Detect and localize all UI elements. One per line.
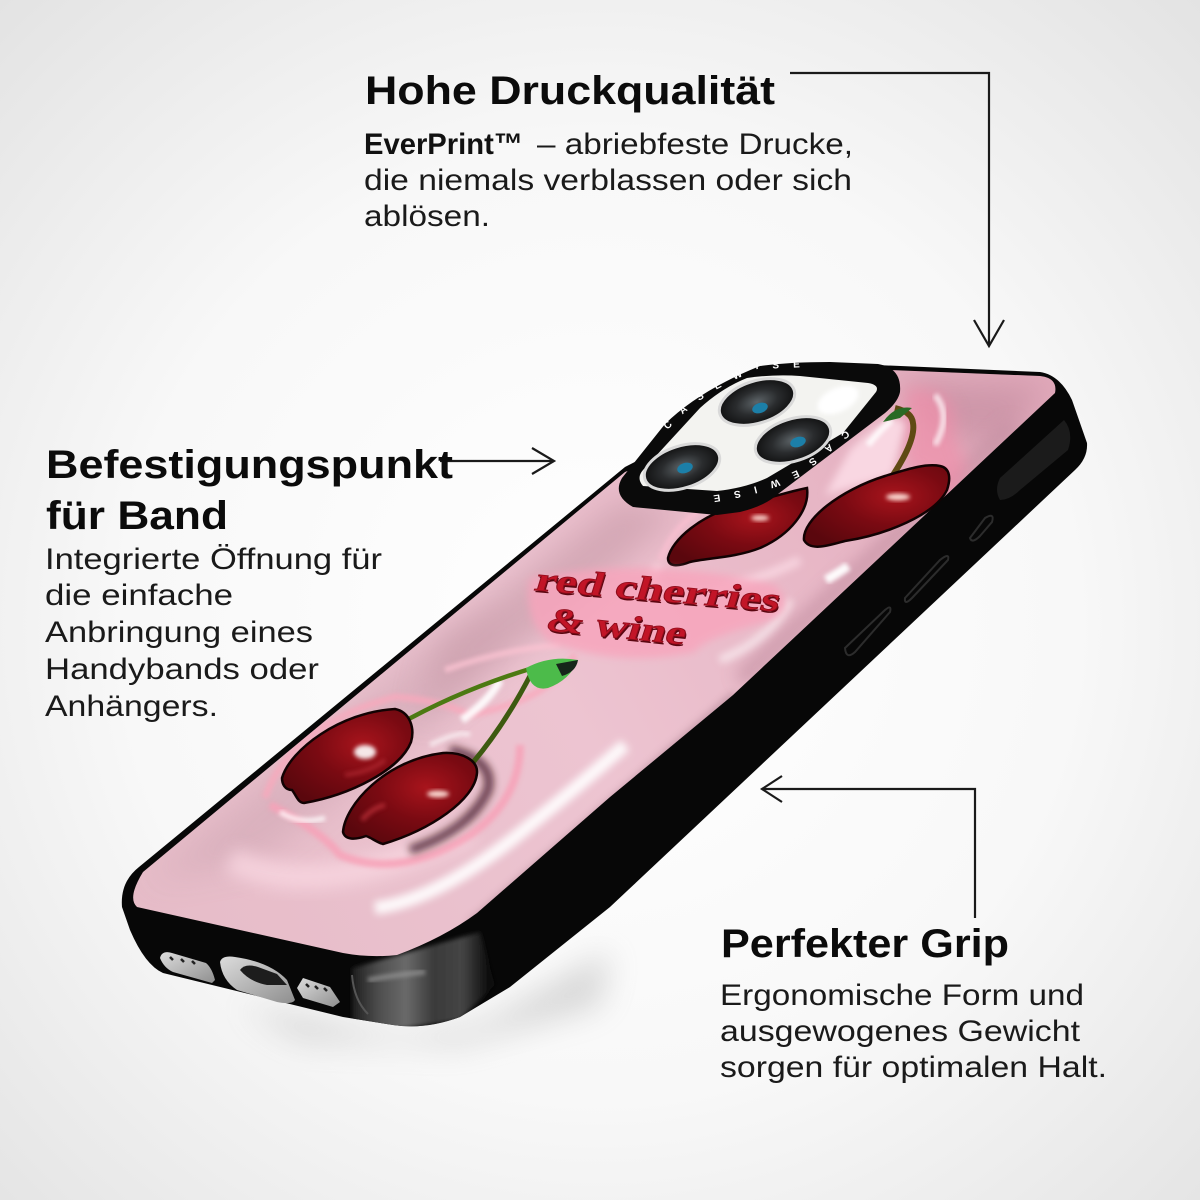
arrow: to print quality — [790, 73, 1004, 346]
heading: Hohe Druckqualität — [365, 69, 775, 113]
plate reflection — [813, 380, 863, 420]
glow around lower cherries — [265, 655, 575, 798]
body — [720, 979, 1107, 1084]
body: die einfache — [45, 579, 233, 612]
bottom ports — [160, 952, 340, 1007]
lens top — [713, 370, 801, 434]
body: ausgewogenes Gewicht — [720, 1015, 1081, 1048]
glow around upper cherries — [905, 388, 968, 505]
speaker left — [160, 952, 215, 983]
cherry left — [668, 488, 807, 565]
stem and leaf — [398, 668, 533, 725]
ring text top: CASEWISE — [664, 362, 800, 428]
body: Anbringung eines — [45, 616, 313, 649]
charging port — [220, 957, 295, 1003]
body: Anhängers. — [45, 690, 218, 723]
print lettering: red cherries & wine: & wine — [543, 603, 694, 654]
bump frame — [619, 362, 900, 515]
pink surface — [133, 370, 1055, 956]
body — [45, 543, 382, 723]
body: EverPrint™ — [364, 128, 523, 161]
body — [364, 128, 853, 233]
phone case with cherry print — [122, 362, 1088, 1026]
text block: print quality — [364, 69, 853, 233]
upper cherries — [668, 408, 949, 565]
lens left — [638, 435, 726, 499]
arrow: to strap point — [440, 448, 554, 474]
body: ablösen. — [364, 200, 490, 233]
lower cherries — [282, 659, 578, 850]
case body — [122, 363, 1087, 1026]
print lettering: red cherries & wine: red cherries — [531, 561, 786, 619]
print lettering: red cherries & wine: & wine — [542, 601, 693, 652]
body: – abriebfeste Drucke, — [537, 128, 853, 161]
cherry right — [343, 753, 477, 844]
camera plate — [640, 375, 877, 491]
cherry right — [804, 465, 949, 547]
phone drop shadow — [240, 950, 610, 1045]
stem — [893, 408, 913, 475]
heading: Befestigungspunkt — [46, 443, 453, 487]
cast shadow — [410, 750, 489, 850]
heading — [46, 443, 453, 538]
lens right — [749, 408, 837, 472]
body: Integrierte Öffnung für — [45, 543, 382, 576]
surface lighting — [150, 380, 1050, 925]
body: die niemals verblassen oder sich — [364, 164, 852, 197]
print lettering: red cherries & wine: red cherries — [532, 563, 787, 621]
body: sorgen für optimalen Halt. — [720, 1051, 1107, 1084]
print lettering: red cherries & wine — [528, 561, 787, 658]
side face detail — [845, 420, 1070, 655]
heading: für Band — [46, 494, 228, 538]
speaker right — [297, 978, 340, 1007]
heading: Perfekter Grip — [721, 922, 1009, 966]
camera bump — [618, 362, 900, 515]
text block: strap point — [45, 443, 453, 723]
corner sheen — [352, 932, 495, 1030]
ring text bottom: CASEWISE — [714, 432, 849, 502]
body: Ergonomische Form und — [720, 979, 1084, 1012]
text block: grip — [720, 922, 1107, 1084]
cherry left — [282, 709, 412, 803]
body: Handybands oder — [45, 653, 319, 686]
arrow: to grip — [762, 776, 975, 918]
